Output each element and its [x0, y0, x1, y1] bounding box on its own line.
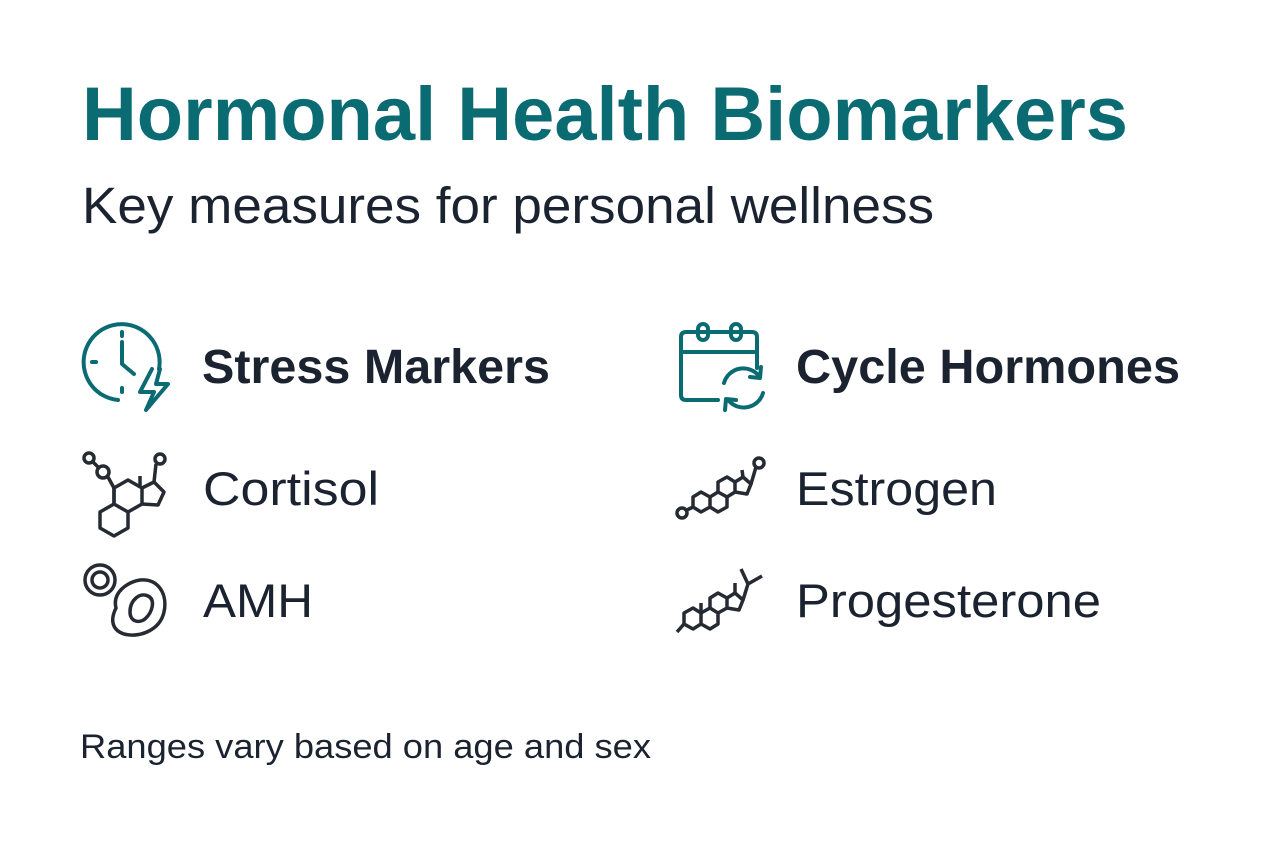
label: AMH: AMH: [203, 574, 313, 627]
label: Estrogen: Estrogen: [796, 462, 997, 515]
title: Hormonal Health Biomarkers: [82, 72, 1128, 157]
icon: cortisol molecule: [84, 453, 165, 536]
icon: clock with lightning: [84, 324, 168, 410]
icon: AMH cells: [85, 565, 165, 635]
icon: estrogen molecule: [677, 458, 764, 518]
footer note: Ranges vary based on age and sex: [80, 728, 651, 766]
icon: calendar refresh: [681, 324, 763, 410]
subtitle: Key measures for personal wellness: [82, 177, 934, 234]
icon: progesterone molecule: [677, 569, 762, 632]
heading: Stress Markers: Stress Markers: [202, 341, 550, 394]
label: Cortisol: Cortisol: [203, 462, 379, 515]
label: Progesterone: Progesterone: [796, 574, 1101, 627]
heading: Cycle Hormones: Cycle Hormones: [796, 341, 1180, 394]
